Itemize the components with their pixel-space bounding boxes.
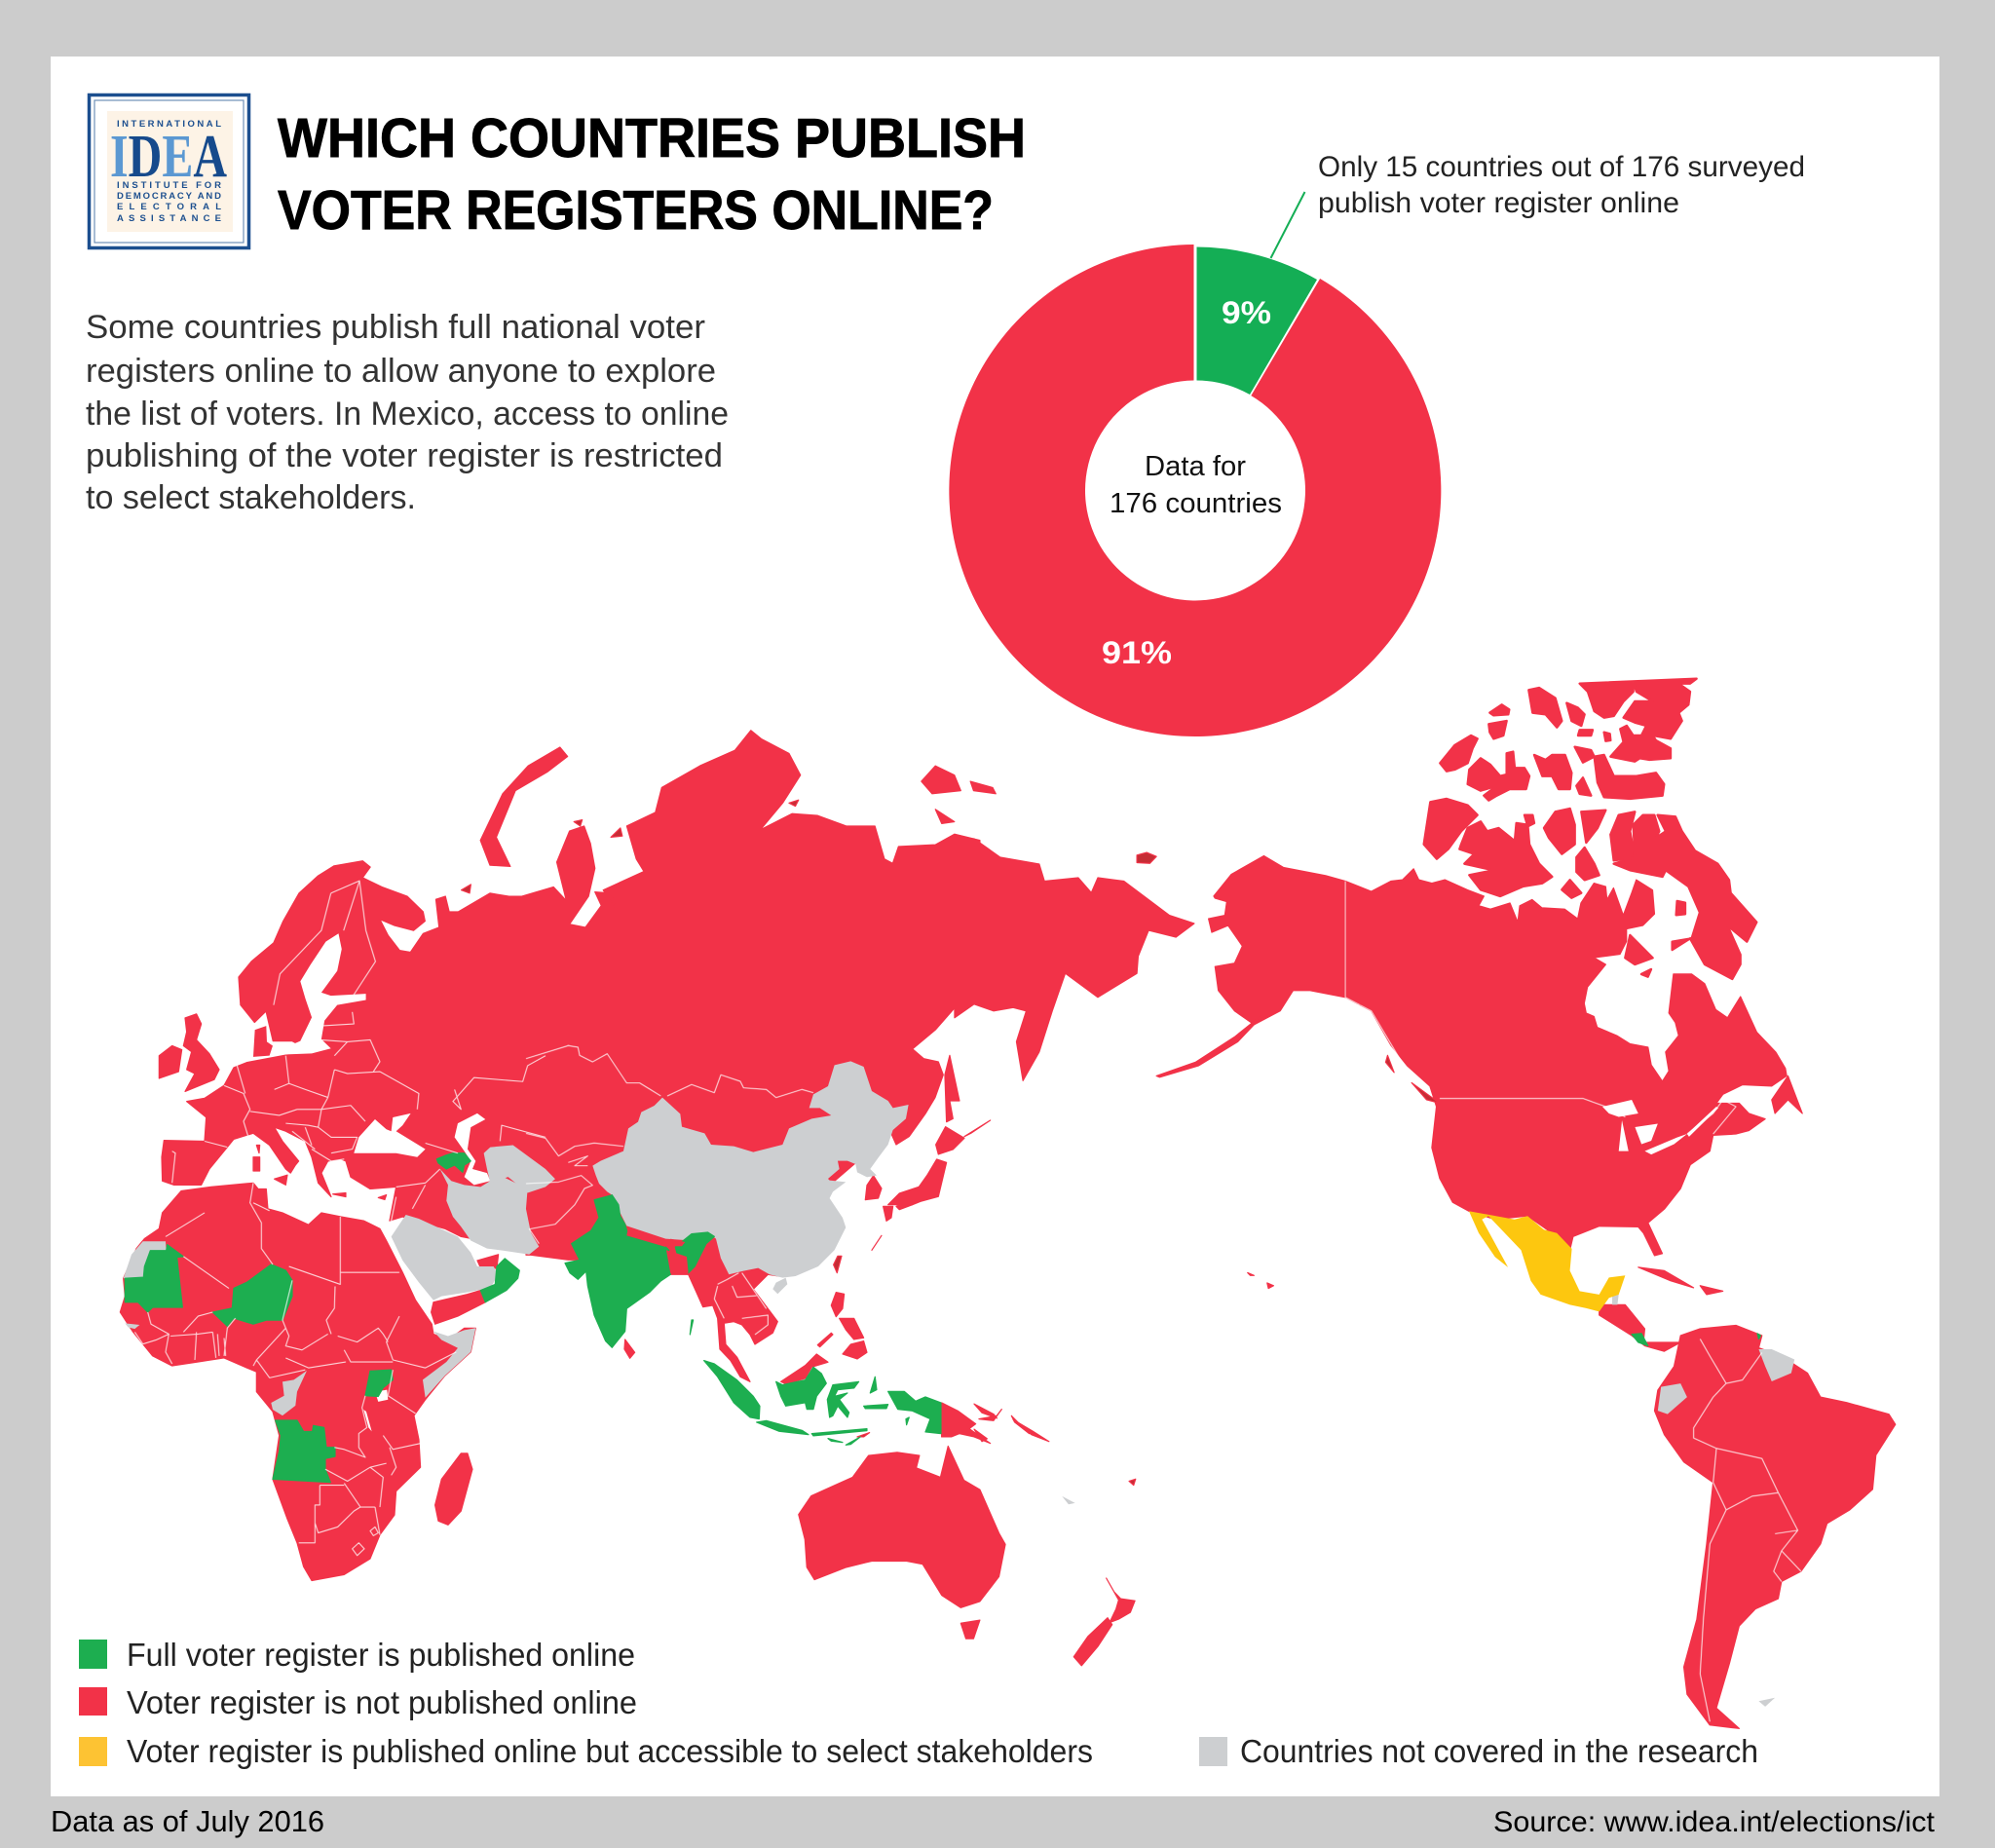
logo: International IDEA	[90, 95, 249, 247]
title: VOTER REGISTERS ONLINE?	[278, 179, 994, 242]
donut chart	[949, 245, 1441, 736]
map: Scandinavia and Russia	[239, 731, 1005, 1639]
title: WHICH COUNTRIES PUBLISH	[278, 107, 1026, 170]
legend	[79, 1637, 1758, 1769]
logo: International IDEA: IDEA	[110, 124, 227, 190]
map: Europe, Africa and Middle East land	[120, 974, 546, 1581]
logo: International IDEA: ASSISTANCE	[117, 213, 221, 224]
logo: International IDEA: DEMOCRACY AND	[117, 191, 221, 202]
map: country borders	[134, 881, 1801, 1721]
map: Asia land	[526, 1033, 1030, 1444]
donut center label: Data for	[1145, 451, 1246, 482]
donut label: 9%: 9%	[1222, 295, 1271, 330]
logo: International IDEA: INSTITUTE FOR	[117, 180, 221, 191]
footer: source: Source: www.idea.int/elections/ict	[1493, 1806, 1936, 1838]
intro text block: registers online to allow anyone to explore	[86, 353, 716, 390]
map: inland seas	[280, 933, 1718, 1431]
world map	[120, 679, 1896, 1728]
map: Canadian Arctic islands	[1424, 679, 1756, 979]
map: red overlays over India	[626, 1227, 689, 1273]
logo: International IDEA: INTERNATIONAL	[117, 119, 221, 130]
logo: International IDEA: ELECTORAL	[117, 202, 221, 212]
legend item: not published: Voter register is not published online	[127, 1684, 637, 1720]
footer: data date: Data as of July 2016	[51, 1804, 324, 1838]
map: Denmark	[253, 1026, 273, 1057]
callout text	[1318, 151, 1805, 219]
map: countries not covered (grey)	[124, 1061, 1794, 1707]
intro text block: the list of voters. In Mexico, access to online	[86, 396, 729, 433]
donut center label	[1110, 451, 1282, 519]
intro text block: publishing of the voter register is restricted	[86, 437, 723, 474]
legend item: full register published: Full voter register is published online	[127, 1637, 635, 1673]
intro text block: Some countries publish full national voter	[86, 309, 705, 346]
donut segment: 91% not published	[949, 245, 1441, 736]
intro text block: to select stakeholders.	[86, 479, 416, 516]
legend item: select stakeholders: Voter register is published online but accessible to select stakeholders	[127, 1733, 1093, 1769]
intro text block	[86, 309, 729, 516]
callout text: Only 15 countries out of 176 surveyed	[1318, 151, 1805, 183]
map: Far East Russia and the Americas land	[955, 839, 1896, 1728]
donut segment: 9% published	[1196, 247, 1317, 395]
map: full register published online (green)	[125, 1153, 1760, 1483]
callout text: publish voter register online	[1318, 187, 1679, 219]
callout line	[1270, 192, 1305, 258]
title	[278, 107, 1026, 242]
map: Mexico (yellow)	[1469, 1211, 1625, 1311]
donut label: 91%: 91%	[1102, 635, 1172, 670]
legend item: not covered: Countries not covered in the research	[1240, 1733, 1758, 1769]
donut center label: 176 countries	[1110, 488, 1282, 519]
